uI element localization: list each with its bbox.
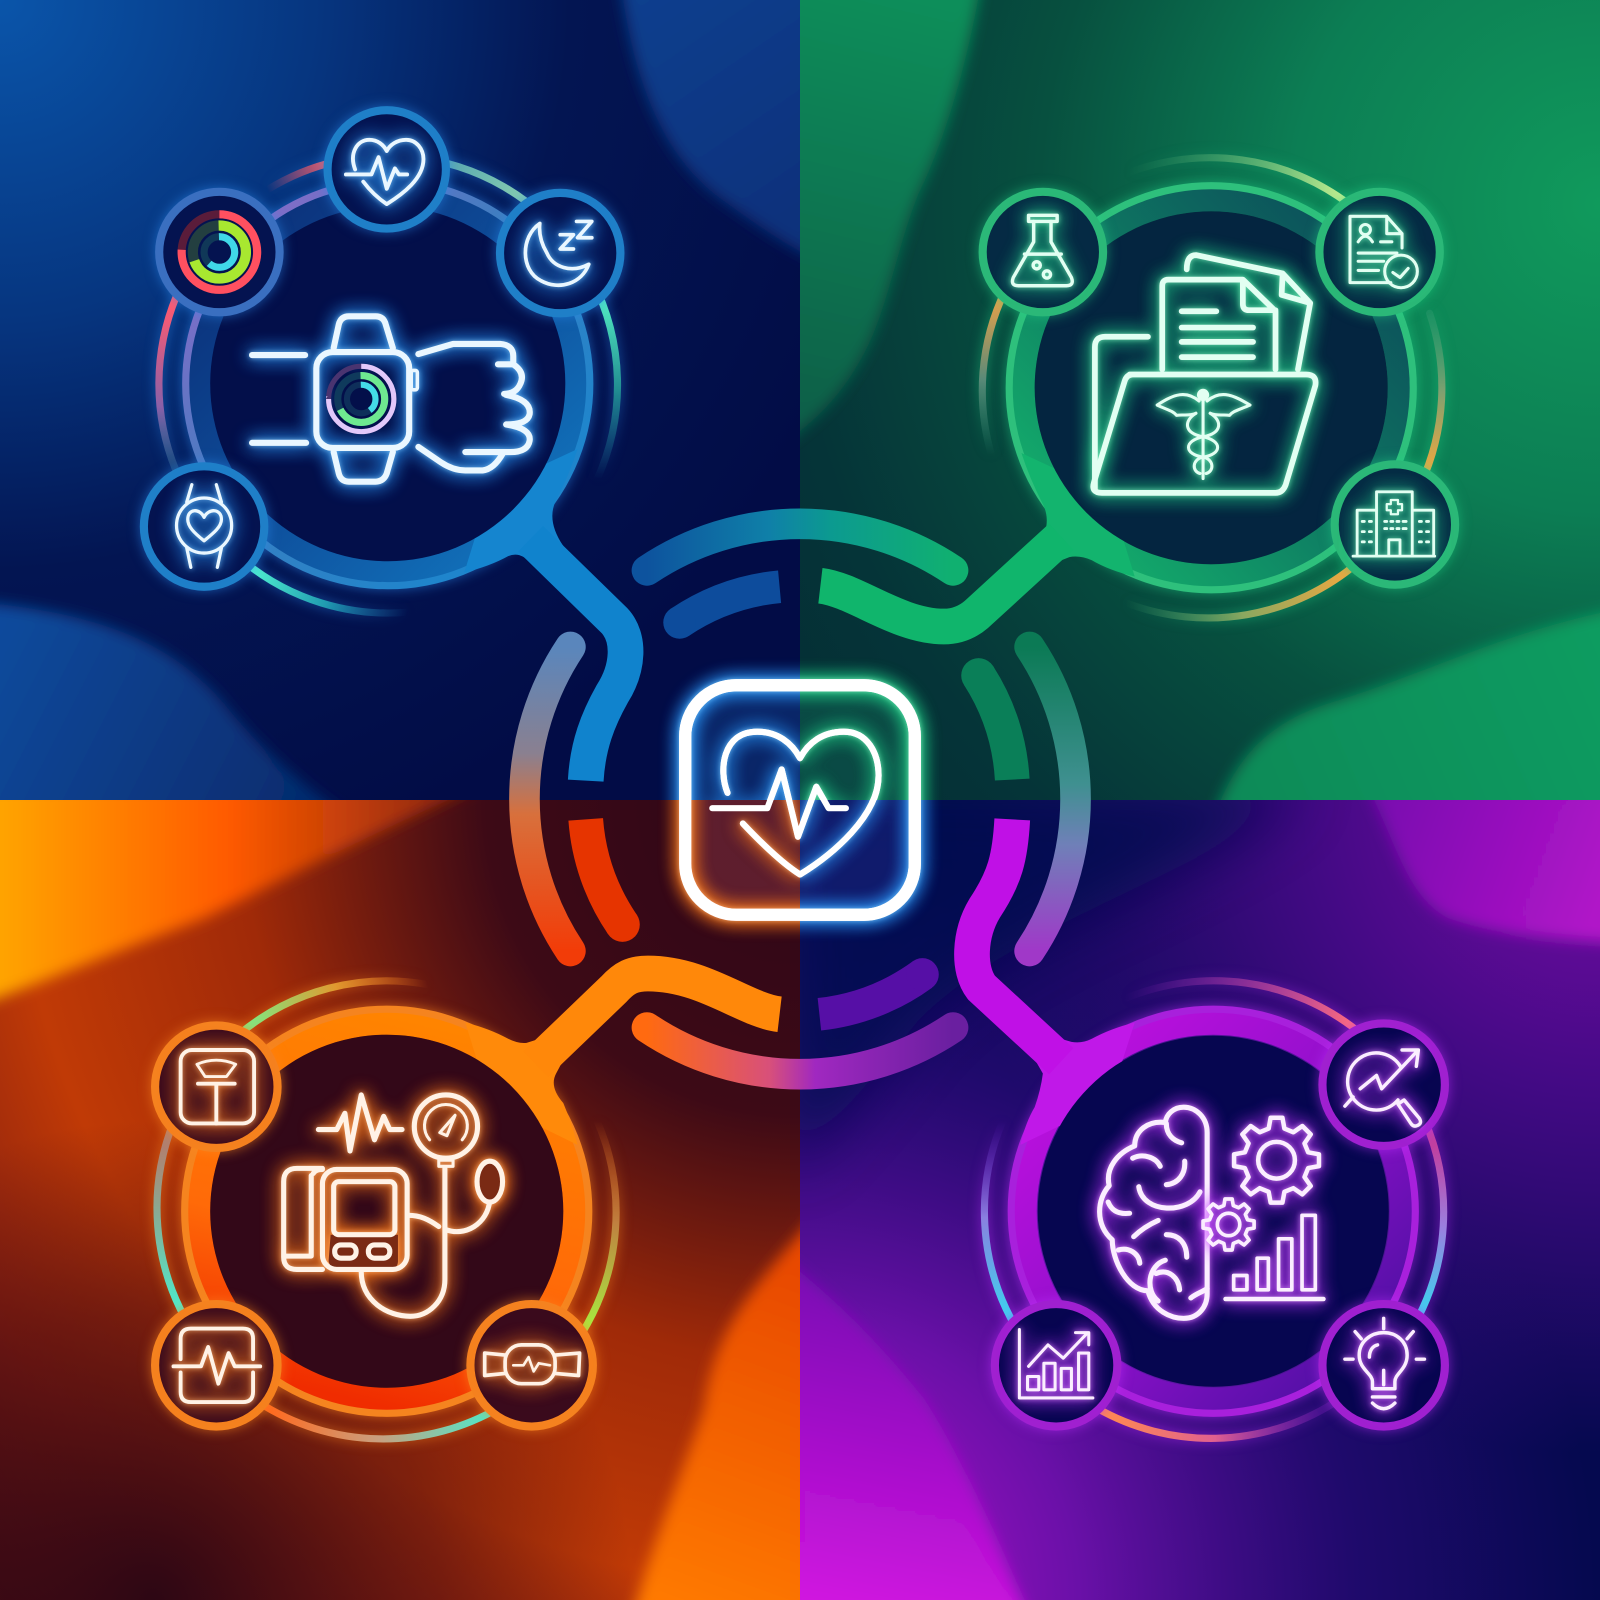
orbit arcs bbox=[984, 981, 1444, 1438]
icon: heart with pulse bbox=[712, 732, 879, 874]
icon: ECG scan bbox=[173, 1329, 260, 1402]
central outer arc segments bbox=[524, 524, 1076, 1074]
node circles bbox=[144, 110, 620, 587]
stub: green bbox=[979, 676, 1012, 780]
icon: activity rings on watch bbox=[329, 366, 394, 432]
tile frame bbox=[685, 685, 915, 915]
orbit arcs bbox=[982, 158, 1442, 618]
stub: red round cap bbox=[605, 907, 640, 942]
arc: right bbox=[1030, 647, 1076, 951]
main ring bbox=[185, 1009, 589, 1413]
icon: fitness band bbox=[485, 1345, 580, 1384]
icon: heart rate bbox=[346, 140, 423, 204]
stub: red bbox=[586, 819, 622, 924]
disc bbox=[1038, 1036, 1389, 1387]
node circles bbox=[983, 192, 1455, 585]
disc bbox=[210, 1035, 563, 1388]
icon: body scale bbox=[181, 1050, 254, 1123]
icon: hospital bbox=[1353, 492, 1435, 556]
panel: wearables (blue) bbox=[144, 110, 626, 781]
main ring bbox=[1011, 1009, 1415, 1413]
icon: lab flask bbox=[1012, 215, 1072, 286]
stub: purple bbox=[819, 974, 922, 1014]
tile glow: purple quadrant bbox=[800, 800, 938, 938]
icon: trend magnifier bbox=[1345, 1050, 1421, 1126]
icon: activity rings bbox=[182, 214, 257, 290]
quadrant: blue bbox=[0, 0, 816, 816]
connector: blue branch bbox=[464, 449, 626, 781]
icon: folder with documents and caduceus bbox=[1093, 255, 1316, 493]
panel: AI analytics (purple) bbox=[972, 819, 1445, 1438]
tile glow: green quadrant bbox=[800, 663, 937, 800]
icon: round watch with heart bbox=[177, 485, 232, 567]
arc: bottom bbox=[647, 1028, 953, 1074]
quadrant: orange bbox=[0, 786, 816, 1600]
icon: smartwatch on wrist bbox=[252, 316, 530, 482]
icon: sleep moon bbox=[525, 221, 592, 285]
arc: top bbox=[647, 524, 953, 570]
main ring bbox=[186, 182, 590, 586]
center: health app tile bbox=[685, 685, 915, 915]
icon: blood pressure monitor bbox=[284, 1095, 503, 1316]
icon: growth chart bbox=[1019, 1330, 1093, 1398]
tile glow: blue quadrant bbox=[662, 662, 800, 800]
connector: orange branch bbox=[465, 973, 780, 1145]
stub: blue bbox=[680, 587, 780, 622]
quadrant: purple bbox=[786, 786, 1600, 1600]
stub: green round cap bbox=[961, 658, 996, 693]
disc bbox=[210, 206, 565, 561]
panel: home monitoring (orange) bbox=[155, 973, 780, 1439]
connector: green branch bbox=[820, 453, 1135, 627]
tile glow: orange quadrant bbox=[662, 800, 800, 938]
connector: purple branch bbox=[972, 819, 1135, 1145]
stub: purple round cap bbox=[906, 958, 939, 991]
panel: medical records (green) bbox=[820, 158, 1455, 627]
quadrant: green bbox=[776, 0, 1600, 816]
icon: gears and bar chart bbox=[1203, 1118, 1323, 1299]
orbit arcs bbox=[159, 160, 618, 613]
central inner arc stubs bbox=[586, 587, 1012, 1014]
main ring bbox=[1009, 186, 1413, 590]
node circles bbox=[155, 1026, 593, 1427]
orbit arcs bbox=[157, 981, 616, 1439]
node circles bbox=[995, 1023, 1445, 1427]
stub: blue round cap bbox=[663, 606, 696, 639]
arc: left bbox=[524, 647, 570, 951]
icon: brain bbox=[1100, 1107, 1207, 1318]
icon: light bulb bbox=[1345, 1318, 1424, 1409]
icon: patient document check bbox=[1350, 216, 1417, 288]
disc bbox=[1035, 211, 1388, 564]
